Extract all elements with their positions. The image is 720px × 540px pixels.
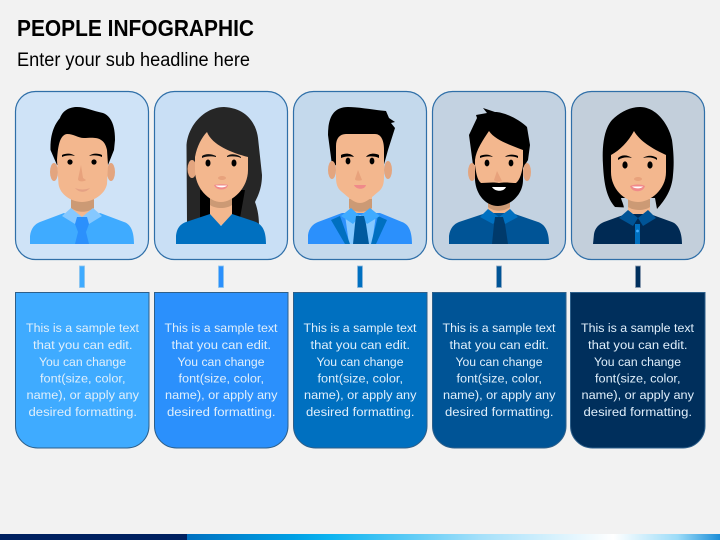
text panel 2: desired formatting. (167, 405, 276, 419)
text panel 3: desired formatting. (306, 405, 414, 419)
portrait card 1: man with light blue tie (16, 92, 148, 260)
text panel 2: name), or apply any (165, 388, 278, 402)
footer bar (0, 534, 720, 540)
text panel 3: font(size, color, (318, 372, 403, 386)
text panel 3: name), or apply any (304, 388, 417, 402)
text panel 1 (16, 292, 149, 448)
text panel 5 (570, 292, 705, 448)
text panel 1: font(size, color, (40, 372, 126, 386)
connector 1 (80, 266, 84, 288)
text panel 5: desired formatting. (584, 405, 692, 419)
text panel 4: This is a sample text (442, 321, 556, 335)
text panel 2: that you can edit. (172, 338, 271, 352)
text panel 5: You can change (594, 355, 681, 369)
text panel 5: This is a sample text (581, 321, 695, 335)
portrait card 2: woman with long hair (154, 92, 288, 260)
text panel 1: This is a sample text (26, 321, 140, 335)
connector 3 (358, 266, 362, 288)
portrait card 4: bearded man (432, 92, 566, 260)
text panel 2: This is a sample text (164, 321, 278, 335)
text panel 3: This is a sample text (304, 321, 417, 335)
title: PEOPLE INFOGRAPHIC (17, 15, 254, 41)
text panel 3: that you can edit. (310, 338, 410, 352)
text panel 5: that you can edit. (588, 338, 688, 352)
text panel 5: name), or apply any (582, 388, 695, 402)
text panel 5: font(size, color, (595, 372, 680, 386)
connector 5 (636, 266, 640, 288)
text panel 4: You can change (456, 355, 543, 369)
portrait card 3: man in blue suit (294, 92, 426, 260)
text panel 1: name), or apply any (26, 388, 140, 402)
text panel 1: You can change (39, 355, 126, 369)
text panel 4: font(size, color, (456, 372, 542, 386)
text panel 3 (294, 292, 427, 448)
connector 4 (496, 266, 502, 288)
text panel 4: desired formatting. (445, 405, 554, 419)
text panel 2: You can change (178, 355, 265, 369)
text panel 4: that you can edit. (450, 338, 549, 352)
text panel 3: You can change (316, 355, 404, 369)
text panel 4 (432, 292, 566, 448)
text panel 1: desired formatting. (28, 405, 137, 419)
connector 2 (218, 266, 224, 288)
text panel 4: name), or apply any (443, 388, 556, 402)
text panel 1: that you can edit. (33, 338, 132, 352)
portrait card 5: woman with short hair (572, 92, 704, 260)
subtitle: Enter your sub headline here (17, 50, 250, 71)
text panel 2: font(size, color, (178, 372, 264, 386)
text panel 2 (154, 292, 288, 448)
